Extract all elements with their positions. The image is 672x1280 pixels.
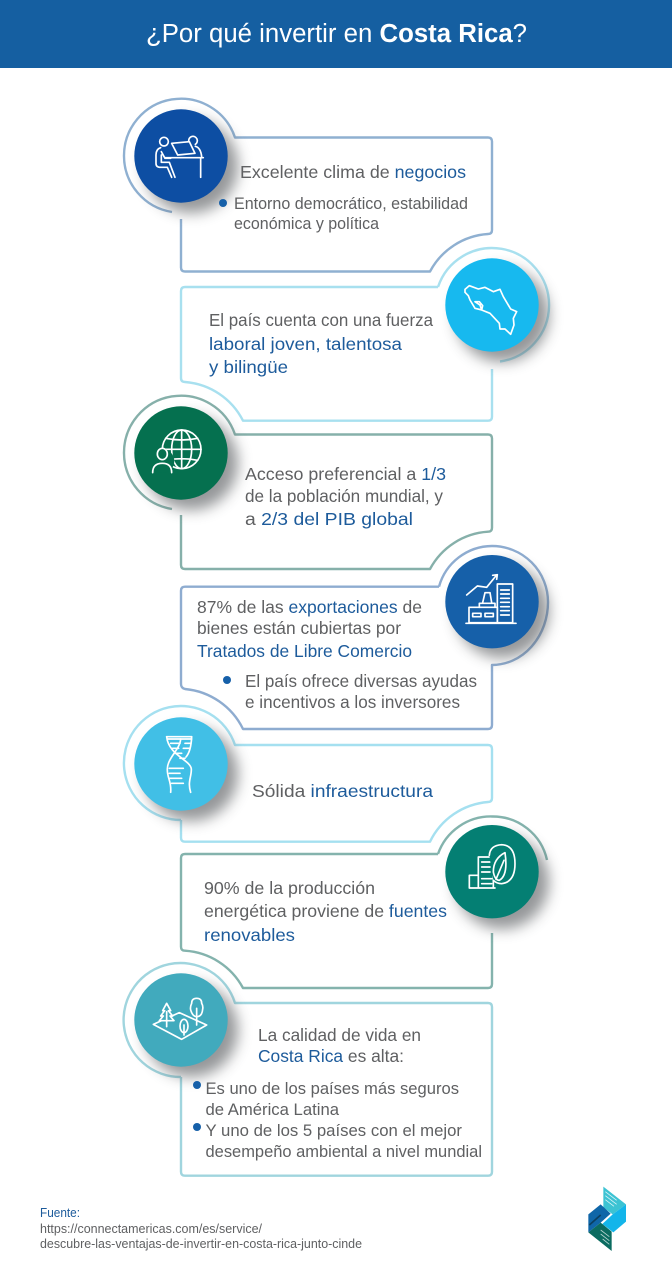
- source note: descubre-las-ventajas-de-invertir-en-costa-rica-junto-cinde: [40, 1237, 362, 1251]
- icon: building and leaf: [445, 825, 539, 918]
- text: acceso preferencial: Acceso preferencial a 1/3: [245, 464, 446, 484]
- text: acceso preferencial: [245, 464, 446, 529]
- text: calidad de vida: [193, 1025, 482, 1161]
- panel 3: acceso preferencial: [124, 396, 492, 569]
- text: clima de negocios: [219, 162, 468, 233]
- panel 1: clima de negocios: [124, 99, 492, 272]
- panel 5: infraestructura: [124, 706, 492, 842]
- text: calidad de vida: de América Latina: [206, 1101, 340, 1119]
- text: exportaciones: 87% de las exportaciones de: [197, 597, 422, 617]
- text: fuerza laboral: laboral joven, talentosa: [209, 334, 402, 354]
- text: calidad de vida: La calidad de vida en: [258, 1025, 421, 1045]
- panel 4: exportaciones: [181, 546, 549, 729]
- text: exportaciones: Tratados de Libre Comercio: [197, 641, 412, 661]
- text: energia renovable: renovables: [204, 925, 295, 945]
- text: clima de negocios: Excelente clima de negocios: [240, 162, 466, 182]
- icon: people at desk: [134, 109, 228, 203]
- text: fuerza laboral: [209, 310, 433, 377]
- text: energia renovable: [204, 878, 447, 945]
- panel 7: calidad de vida: [124, 963, 492, 1176]
- title: ¿Por qué invertir en Costa Rica?: [146, 20, 527, 48]
- text: exportaciones: [197, 597, 477, 712]
- icon: factory and growth chart: [445, 555, 539, 648]
- text: exportaciones: e incentivos a los inversores: [245, 692, 460, 712]
- header bar: [0, 0, 672, 68]
- icon: DNA strand: [134, 717, 228, 811]
- text: clima de negocios: Entorno democrático, estabilidad: [234, 195, 468, 213]
- text: energia renovable: 90% de la producción: [204, 878, 375, 898]
- text: clima de negocios: económica y política: [234, 215, 380, 233]
- text: infraestructura: Sólida infraestructura: [252, 781, 433, 801]
- text: energia renovable: energética proviene de fuentes: [204, 901, 447, 921]
- text: fuerza laboral: El país cuenta con una fuerza: [209, 310, 433, 330]
- text: calidad de vida: Es uno de los países más seguros: [206, 1080, 459, 1098]
- text: acceso preferencial: a 2/3 del PIB global: [245, 509, 413, 529]
- text: calidad de vida: Costa Rica es alta:: [258, 1046, 404, 1066]
- logo: [588, 1187, 626, 1251]
- panel 6: energia renovable: [181, 816, 549, 988]
- source note: [40, 1206, 362, 1251]
- icon: globe and person: [134, 406, 228, 500]
- text: exportaciones: bienes están cubiertas por: [197, 618, 401, 638]
- text: fuerza laboral: y bilingüe: [209, 357, 288, 377]
- source note: Fuente:: [40, 1206, 80, 1220]
- source note: https://connectamericas.com/es/service/: [40, 1222, 263, 1236]
- text: calidad de vida: desempeño ambiental a nivel mundial: [206, 1143, 482, 1161]
- text: calidad de vida: Y uno de los 5 países con el mejor: [206, 1122, 463, 1140]
- text: exportaciones: El país ofrece diversas ayudas: [245, 671, 477, 691]
- text: acceso preferencial: de la población mundial, y: [245, 486, 443, 506]
- panel 2: fuerza laboral: [181, 248, 549, 421]
- icon: map of Costa Rica: [445, 258, 539, 352]
- icon: park with trees: [134, 973, 228, 1067]
